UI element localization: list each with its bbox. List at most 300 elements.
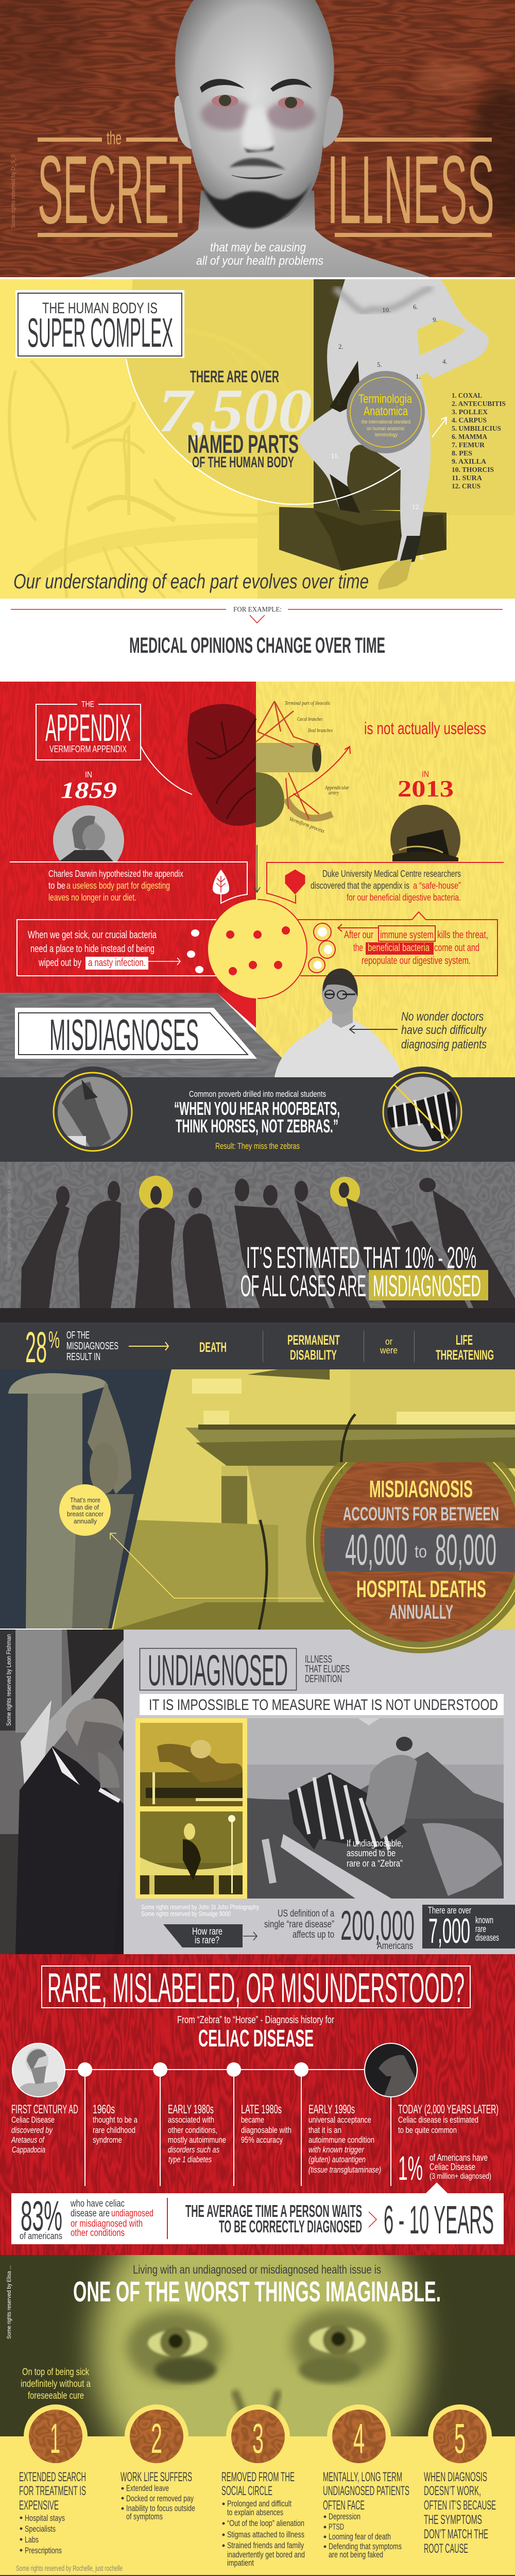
statistic: 200,000 Americans xyxy=(264,1903,415,1952)
photo: tired face xyxy=(0,2255,515,2436)
photo credits xyxy=(141,1903,259,1918)
list of body parts: 1. COXAL xyxy=(452,392,482,400)
portrait: Aretaeus xyxy=(12,2043,65,2097)
panel: the appendix: APPENDIX xyxy=(45,706,131,749)
badge: terminologia anatomica: Terminologia xyxy=(358,392,412,406)
heading: one of the worst things imaginable xyxy=(73,2263,441,2308)
statistic: 7,500 named parts: OF THE HUMAN BODY xyxy=(192,454,294,471)
column 3: removed from social circle: impatient xyxy=(227,2558,254,2568)
label: of the misdiagnoses result in: MISDIAGNOSES xyxy=(66,1341,118,1352)
yellow background with domes xyxy=(0,2404,515,2575)
column 4: mentally: MENTALLY, LONG TERM xyxy=(323,2470,402,2484)
statistic: 7,000 rare diseases: diseases xyxy=(475,1933,499,1943)
note: no wonder doctors: have such difficulty xyxy=(401,1023,487,1037)
bubble: more than breast cancer: breast cancer xyxy=(67,1510,104,1518)
column 4: mentally xyxy=(323,2470,409,2560)
text box: Darwin hypothesis xyxy=(10,862,247,903)
column 3: removed from social circle: Strained friends and family xyxy=(227,2540,304,2550)
column 4: mentally: UNDIAGNOSED PATIENTS xyxy=(323,2484,409,2498)
panel: 28 percent outcomes xyxy=(0,1323,515,1371)
numbered body labels: 5. xyxy=(377,361,382,368)
ground background xyxy=(0,1162,515,1323)
statistic: 200,000 Americans: Americans xyxy=(377,1941,413,1952)
note: no wonder doctors xyxy=(401,1010,487,1052)
photo credit: Some rights reserved by D_S_0 xyxy=(10,155,16,228)
anatomy drawing: stomach and pancreas xyxy=(9,330,299,598)
column 1: extended search xyxy=(19,2470,86,2555)
note: no wonder doctors: diagnosing patients xyxy=(401,1038,487,1052)
column 3: removed from social circle: REMOVED FROM THE xyxy=(221,2470,295,2484)
timeline: early 1990s: EARLY 1990s xyxy=(308,2103,355,2116)
heading: one of the worst things imaginable: Living with an undiagnosed or misdiagnosed health issue is xyxy=(133,2263,381,2276)
subheading: celiac disease xyxy=(177,2014,334,2052)
caption: if undiagnosable xyxy=(347,1838,403,1869)
panel: shadows, 10-20 percent misdiagnosed xyxy=(0,1162,515,1323)
text box: bacteria hide: When we get sick, our crucial bacteria xyxy=(28,929,157,941)
banner: misdiagnoses xyxy=(15,1008,257,1060)
text box: Darwin hypothesis: a useless body part for digesting xyxy=(66,880,170,891)
white panel: 83 percent and waiting time: disease are xyxy=(71,2208,110,2219)
timeline: today: to be quite common xyxy=(398,2125,457,2135)
column 3: removed from social circle: SOCIAL CIRCLE xyxy=(221,2484,272,2498)
timeline: early 1990s: (gluten) autoantigen xyxy=(308,2155,366,2164)
note: on top of being sick: On top of being sick xyxy=(22,2367,89,2378)
column 1: extended search: Prescriptions xyxy=(25,2546,62,2555)
statistic: 7,500 named parts xyxy=(158,367,312,471)
numbered body labels: 1. xyxy=(416,372,421,380)
photo: Duke University Medical Centre xyxy=(390,805,460,861)
timeline: today: of Americans have xyxy=(430,2153,488,2163)
text box: bacteria hide: wiped out by xyxy=(38,957,81,969)
numbered body labels: 3. xyxy=(337,398,342,406)
band: 40,000 to 80,000 xyxy=(324,1528,515,1571)
bubble: more than breast cancer: than die of xyxy=(72,1503,99,1511)
panel: undiagnosed xyxy=(0,1630,515,1954)
text box: Duke researchers: for our beneficial digestive bacteria. xyxy=(347,892,461,903)
heading box: undiagnosed: THAT ELUDES xyxy=(305,1664,350,1675)
illustration labels: Appendicular xyxy=(324,785,350,791)
column 3: removed from social circle: Prolonged and difficult xyxy=(227,2499,291,2509)
arc line xyxy=(126,359,401,504)
callout: misdiagnosis hospital deaths wood circle xyxy=(306,1462,515,1653)
photo pair: horse jumping xyxy=(135,1718,247,1899)
white panel: 83 percent and waiting time: of americans xyxy=(20,2231,62,2241)
photo: man with red eyes xyxy=(80,0,430,277)
photo: horse xyxy=(52,1072,134,1154)
red arrow xyxy=(289,747,350,798)
tagline: that may be causing xyxy=(210,241,306,255)
timeline: late 1980s: diagnosable with xyxy=(241,2125,291,2135)
timeline: today: Celiac disease is estimated xyxy=(398,2115,478,2125)
text box: Duke researchers: a “safe-house” xyxy=(413,880,461,891)
panel: rare, mislabeled or misunderstood xyxy=(0,1954,515,2255)
timeline: early 1990s: (tissue transglutaminase) xyxy=(308,2165,381,2175)
title: the: the xyxy=(107,127,122,148)
divider: for example: FOR EXAMPLE: xyxy=(233,606,282,614)
timeline: early 1980s: type 1 diabetes xyxy=(168,2155,212,2164)
white panel: 83 percent and waiting time: TO BE CORRECTLY DIAGNOSED xyxy=(219,2217,362,2236)
column 1: extended search: Hospital stays xyxy=(25,2513,65,2523)
photo: woman with sheet on navy xyxy=(0,1369,171,1629)
statement: estimated share xyxy=(241,1241,488,1303)
text box: immune system: beneficial bacteria xyxy=(368,942,430,954)
column 1: extended search: EXPENSIVE xyxy=(19,2498,59,2513)
people shadows xyxy=(0,1178,515,1323)
white panel: 83 percent and waiting time: other conditions xyxy=(71,2228,125,2239)
timeline: early 1990s: universal acceptance xyxy=(308,2115,371,2125)
wood number badges xyxy=(29,2410,487,2463)
band: hoofbeats proverb xyxy=(0,1066,515,1162)
yellow background xyxy=(0,279,515,599)
column 4: mentally: Looming fear of death xyxy=(329,2532,391,2541)
text box: immune system xyxy=(297,912,497,976)
timeline: late 1980s: became xyxy=(241,2115,264,2125)
timeline: first century: Aretaeus of xyxy=(11,2135,45,2145)
statistic: 7,500 named parts: 7,500 xyxy=(158,376,312,445)
timeline: early 1990s xyxy=(308,2103,381,2175)
timeline: early 1980s: mostly autoimmune xyxy=(168,2135,226,2145)
timeline: today xyxy=(398,2103,499,2187)
photo: crossed-out zebra xyxy=(383,1073,461,1151)
outcomes: or xyxy=(385,1336,392,1347)
badge: terminologia anatomica xyxy=(347,371,425,453)
list of body parts: 10. THORCIS xyxy=(452,466,494,474)
tagline xyxy=(196,241,323,268)
text: misdiagnosis accounts for between xyxy=(343,1476,499,1524)
photo: posed man xyxy=(299,279,489,590)
proverb text: Result: They miss the zebras xyxy=(215,1141,300,1151)
arrow to parts list xyxy=(432,417,447,437)
diagram: white bacteria spots xyxy=(187,929,203,973)
panel: hero title: SECRET xyxy=(38,135,192,244)
wood background xyxy=(0,0,515,277)
illustration labels: Terminal part of ileocolic xyxy=(285,700,331,706)
text box: immune system: come out and xyxy=(434,942,479,954)
statistic: 7,500 named parts: NAMED PARTS xyxy=(187,430,299,459)
panel: leaky gut xyxy=(0,2575,515,2576)
column 2: work life suffers xyxy=(121,2470,195,2521)
wood number badges: 3 xyxy=(252,2415,264,2462)
badge: terminologia anatomica: the international standard xyxy=(362,419,410,425)
heading box: human body is super complex xyxy=(15,290,184,358)
list of body parts: 8. PES xyxy=(452,450,472,457)
panel: hospital deaths photos xyxy=(0,1369,515,1630)
connector to appendix xyxy=(141,746,192,794)
panel: hero title xyxy=(0,0,515,277)
text box: Duke researchers: discovered that the appendix is xyxy=(311,880,409,891)
proverb text xyxy=(174,1089,340,1151)
column 3: removed from social circle xyxy=(221,2470,305,2568)
white panel: 83 percent and waiting time: who have celiac xyxy=(70,2198,125,2209)
list of body parts: 3. POLLEX xyxy=(452,409,488,416)
column 4: mentally: are not being faked xyxy=(329,2550,383,2560)
timeline: first century: discovered by xyxy=(11,2125,53,2135)
date: in 2013 xyxy=(398,769,454,802)
spotlight ovals xyxy=(139,1176,360,1210)
wood number badges: 5 xyxy=(454,2415,466,2462)
list of body parts: 2. ANTECUBITIS xyxy=(452,400,506,408)
callout: how rare is rare: is rare? xyxy=(195,1935,219,1946)
timeline: first century: FIRST CENTURY AD xyxy=(11,2103,78,2116)
numbered body labels: 8. xyxy=(420,553,425,561)
statistic: 7,000 rare diseases: There are over xyxy=(428,1905,471,1916)
diagram: returning bacteria xyxy=(308,923,335,973)
column 5: when diagnosis doesn't work: ROOT CAUSE xyxy=(424,2541,468,2556)
timeline xyxy=(65,2062,391,2186)
column 3: removed from social circle: Stigmas attached to illness xyxy=(227,2530,304,2539)
numbered body labels: 9. xyxy=(433,316,438,324)
timeline: late 1980s: LATE 1980s xyxy=(241,2103,282,2116)
timeline: late 1980s xyxy=(241,2103,291,2145)
date: in 2013: 2013 xyxy=(398,776,454,802)
photo: morgue room xyxy=(103,1369,515,1630)
column 2: work life suffers: WORK LIFE SUFFERS xyxy=(121,2470,192,2484)
numbered body labels: 4. xyxy=(442,358,448,365)
outcomes xyxy=(199,1331,494,1363)
wood number badges: 2 xyxy=(151,2415,162,2462)
outcomes: PERMANENT xyxy=(287,1332,340,1348)
text box: bacteria hide: need a place to hide instead of being xyxy=(30,943,154,955)
numbered body labels: 2. xyxy=(338,343,344,350)
statistic: 7,000 rare diseases: 7,000 xyxy=(428,1911,470,1951)
photo: doctor xyxy=(274,969,402,1077)
bubble: more than breast cancer: That’s more xyxy=(70,1496,100,1504)
badge: terminologia anatomica: Anatomica xyxy=(364,404,408,418)
note: on top of being sick: foreseeable cure xyxy=(28,2391,84,2401)
illustration labels: Cæcal branches xyxy=(297,716,322,722)
timeline: early 1980s: EARLY 1980s xyxy=(168,2103,214,2116)
outcomes: DISABILITY xyxy=(290,1347,337,1363)
split background xyxy=(0,682,515,1077)
title rules xyxy=(38,138,492,237)
timeline: early 1980s: associated with xyxy=(168,2115,214,2125)
outcomes: DEATH xyxy=(199,1340,227,1355)
column 1: extended search: Specialists xyxy=(25,2524,56,2534)
tagline: all of your health problems xyxy=(196,254,323,268)
text: hospital deaths annually xyxy=(356,1575,486,1623)
statistic: 200,000 Americans: single “rare disease” xyxy=(264,1919,334,1930)
caption: if undiagnosable: assumed to be xyxy=(347,1848,396,1858)
dark background xyxy=(0,2575,515,2576)
illustration labels: Ileal branches xyxy=(307,727,333,734)
illustration labels: Vermiform process xyxy=(288,816,325,834)
heading box: the appendix: VERMIFORM APPENDIX xyxy=(49,744,127,754)
photo credits: Some rights reserved by John St John Photography xyxy=(141,1903,259,1911)
arrow xyxy=(129,1342,168,1350)
timeline: 1960s: syndrome xyxy=(93,2135,122,2145)
diagram: cecum circle xyxy=(208,900,307,998)
text box: Darwin hypothesis: leaves no longer in our diet. xyxy=(48,892,136,903)
callout: how rare is rare xyxy=(163,1924,257,1947)
photo credits: Some rights reserved by Smudge 9000 xyxy=(141,1910,231,1918)
timeline: today: 1% xyxy=(398,2149,423,2187)
text box: Darwin hypothesis: Charles Darwin hypothesized the appendix xyxy=(48,869,183,879)
statistic: 7,000 rare diseases: known xyxy=(475,1915,493,1925)
text box: Duke researchers xyxy=(267,862,504,903)
outcomes: were xyxy=(380,1345,398,1355)
list of body parts: 7. FEMUR xyxy=(452,442,485,449)
bubble: more than breast cancer xyxy=(59,1484,111,1536)
band: 40,000 to 80,000: to xyxy=(415,1542,427,1562)
callout: how rare is rare: How rare xyxy=(192,1926,222,1937)
column 1: extended search: Labs xyxy=(25,2535,39,2545)
badge: terminologia anatomica: terminology xyxy=(375,432,398,438)
note: on top of being sick: indefinitely without a xyxy=(21,2379,91,2389)
heading box: human body is super complex: THE HUMAN BODY IS xyxy=(42,300,158,317)
list of body parts: 4. CARPUS xyxy=(452,417,487,425)
column 4: mentally: Depression xyxy=(329,2512,360,2521)
photo: cross country xyxy=(140,1811,243,1894)
numbered body labels: 10. xyxy=(382,306,390,314)
timeline: first century: Cappadocia xyxy=(12,2145,45,2155)
pillar and plinth xyxy=(279,279,447,571)
arrow from deaths to bubble xyxy=(110,1533,332,1598)
timeline: 1960s xyxy=(93,2103,138,2145)
text: hospital deaths annually: ANNUALLY xyxy=(389,1601,453,1623)
photo: man in suit xyxy=(0,1630,124,1954)
caption: if undiagnosable: If undiagnosable, xyxy=(347,1838,403,1849)
column 4: mentally: PTSD xyxy=(329,2522,344,2532)
timeline: 1960s: 1960s xyxy=(93,2103,115,2116)
photo credit: Some rights reserved by Grzegorz Łobiński xyxy=(6,1170,12,1268)
statistic: 28%: % xyxy=(48,1326,60,1353)
proverb text: “WHEN YOU HEAR HOOFBEATS, xyxy=(174,1098,340,1119)
credit strip xyxy=(0,1630,15,1731)
heading box: the appendix: THE xyxy=(81,700,94,709)
icon: shield xyxy=(285,869,305,895)
text box: immune system: repopulate our digestive system. xyxy=(362,955,471,967)
column 4: mentally: Defending that symptoms xyxy=(329,2541,402,2551)
list of body parts: 5. UMBILICIUS xyxy=(452,425,501,433)
photo: man riding zebra xyxy=(247,1718,504,1899)
numbered body labels: 6. xyxy=(413,303,418,311)
text box: immune system: the xyxy=(353,942,363,954)
badge: terminologia anatomica: on human anatomic xyxy=(367,426,405,432)
band: 40,000 to 80,000: 40,000 xyxy=(345,1526,407,1574)
wood number badges: 4 xyxy=(353,2415,365,2462)
proverb text: Common proverb drilled into medical students xyxy=(189,1089,326,1099)
label: of the misdiagnoses result in: OF THE xyxy=(66,1330,90,1341)
timeline: early 1980s: other conditions, xyxy=(168,2125,217,2135)
olive ring and yellow line xyxy=(306,1462,515,1653)
date: in 2013: IN xyxy=(422,769,429,779)
panel: human body is super complex xyxy=(0,279,515,599)
date: in 1859 xyxy=(61,770,117,803)
portrait: horse xyxy=(365,2043,417,2097)
heading box: undiagnosed: ILLNESS xyxy=(305,1654,332,1665)
grey wood background xyxy=(0,993,301,1077)
column 4: mentally: OFTEN FACE xyxy=(323,2498,365,2513)
numbered body labels xyxy=(331,303,448,561)
subheading: celiac disease: CELIAC DISEASE xyxy=(198,2025,314,2052)
list of body parts: 11. SURA xyxy=(452,474,483,482)
arrow to doctor xyxy=(350,1025,398,1033)
credit strip: Some rights reserved by Leon Fishman xyxy=(5,1634,12,1726)
timeline: today: Celiac Disease xyxy=(430,2162,475,2172)
panel: misdiagnoses xyxy=(0,969,515,1162)
panel: worst things imaginable xyxy=(0,2255,515,2575)
white panel: 83 percent and waiting time xyxy=(11,2182,504,2244)
column 2: work life suffers: of symptoms xyxy=(126,2512,163,2521)
paper background xyxy=(0,1630,515,1954)
column 1: extended search: FOR TREATMENT IS xyxy=(19,2484,86,2498)
white panel: 83 percent and waiting time: 83% xyxy=(21,2193,62,2240)
text box: bacteria hide: a nasty infection. xyxy=(88,957,146,969)
bubble: more than breast cancer: annually xyxy=(74,1517,97,1525)
timeline: 1960s: thought to be a xyxy=(93,2115,138,2125)
illustration labels xyxy=(285,700,350,834)
timeline: early 1980s: disorders such as xyxy=(168,2145,219,2155)
list of body parts: 9. AXILLA xyxy=(452,458,487,466)
red wood background xyxy=(0,1954,515,2255)
label: of the misdiagnoses result in: RESULT IN xyxy=(66,1351,100,1363)
credit: Some rights reserved by Rochelle, just rochelle xyxy=(16,2564,123,2573)
outcomes: LIFE xyxy=(456,1332,473,1348)
column 2: work life suffers: Extended leave xyxy=(126,2483,169,2493)
column 5: when diagnosis doesn't work xyxy=(424,2470,496,2556)
column 2: work life suffers: Inability to focus outside xyxy=(126,2503,195,2513)
white panel: 83 percent and waiting time: THE AVERAGE TIME A PERSON WAITS xyxy=(185,2201,362,2221)
illustration labels: artery xyxy=(329,790,339,796)
photo: Charles Darwin xyxy=(53,805,124,861)
text box: Darwin hypothesis: to be xyxy=(48,880,65,891)
statistic: 7,000 rare diseases: rare xyxy=(475,1924,486,1934)
wood disc xyxy=(320,1462,515,1642)
heading box: undiagnosed: DEFINITION xyxy=(305,1673,342,1685)
label: of the misdiagnoses result in xyxy=(66,1330,118,1363)
photo: show jumping xyxy=(140,1723,243,1806)
text box: immune system: After our xyxy=(344,929,373,941)
heading box: undiagnosed xyxy=(140,1646,350,1694)
panel: the appendix xyxy=(0,682,515,1077)
timeline: early 1990s: that it is an xyxy=(308,2125,341,2135)
statistic: 28%: 28 xyxy=(25,1323,47,1371)
panel: human body is super complex: SUPER COMPLEX xyxy=(27,310,173,355)
caption: understanding evolves: Our understanding of each part evolves over time xyxy=(13,570,369,593)
numbered body labels: 11. xyxy=(331,452,339,460)
date: in 1859: 1859 xyxy=(61,777,117,803)
column 1: extended search: EXTENDED SEARCH xyxy=(19,2470,86,2484)
list of body parts: 6. MAMMA xyxy=(452,433,488,441)
column 3: removed from social circle: to explain absences xyxy=(227,2507,283,2517)
timeline: first century: Celiac Disease xyxy=(11,2115,55,2125)
column 3: removed from social circle: inadvertently get bored and xyxy=(227,2550,305,2560)
text box: immune system: immune system xyxy=(380,929,434,941)
timeline: today: (3 million+ diagnosed) xyxy=(430,2172,491,2181)
timeline: early 1990s: with known trigger xyxy=(308,2145,365,2155)
timeline: early 1990s: autoimmune condition xyxy=(308,2135,374,2145)
panel: undiagnosed: 200,000 xyxy=(340,1903,415,1949)
statistic: 200,000 Americans: affects up to xyxy=(293,1929,334,1940)
timeline: late 1980s: 95% accuracy xyxy=(241,2135,283,2145)
column 2: work life suffers: Docked or removed pay xyxy=(126,2494,194,2503)
column 3: removed from social circle: “Out of the loop” alienation xyxy=(227,2518,304,2528)
icon: leaf xyxy=(213,870,229,894)
divider: for example xyxy=(11,606,503,623)
list of body parts: 12. CRUS xyxy=(452,483,480,490)
heading box: undiagnosed: UNDIAGNOSED xyxy=(148,1646,288,1694)
note: on top of being sick xyxy=(21,2367,91,2401)
note: no wonder doctors: No wonder doctors xyxy=(401,1010,484,1024)
timeline: early 1980s xyxy=(168,2103,226,2164)
white panel: 83 percent and waiting time: undiagnosed xyxy=(111,2208,153,2219)
down arrow into cecum xyxy=(254,845,260,892)
heading box: the appendix xyxy=(36,700,141,760)
timeline: first century xyxy=(11,2103,78,2155)
white panel: 83 percent and waiting time: or misdiagnosed with xyxy=(71,2218,143,2229)
proverb text: THINK HORSES, NOT ZEBRAS.” xyxy=(176,1115,338,1137)
banner: misdiagnoses: MISDIAGNOSES xyxy=(49,1011,199,1060)
